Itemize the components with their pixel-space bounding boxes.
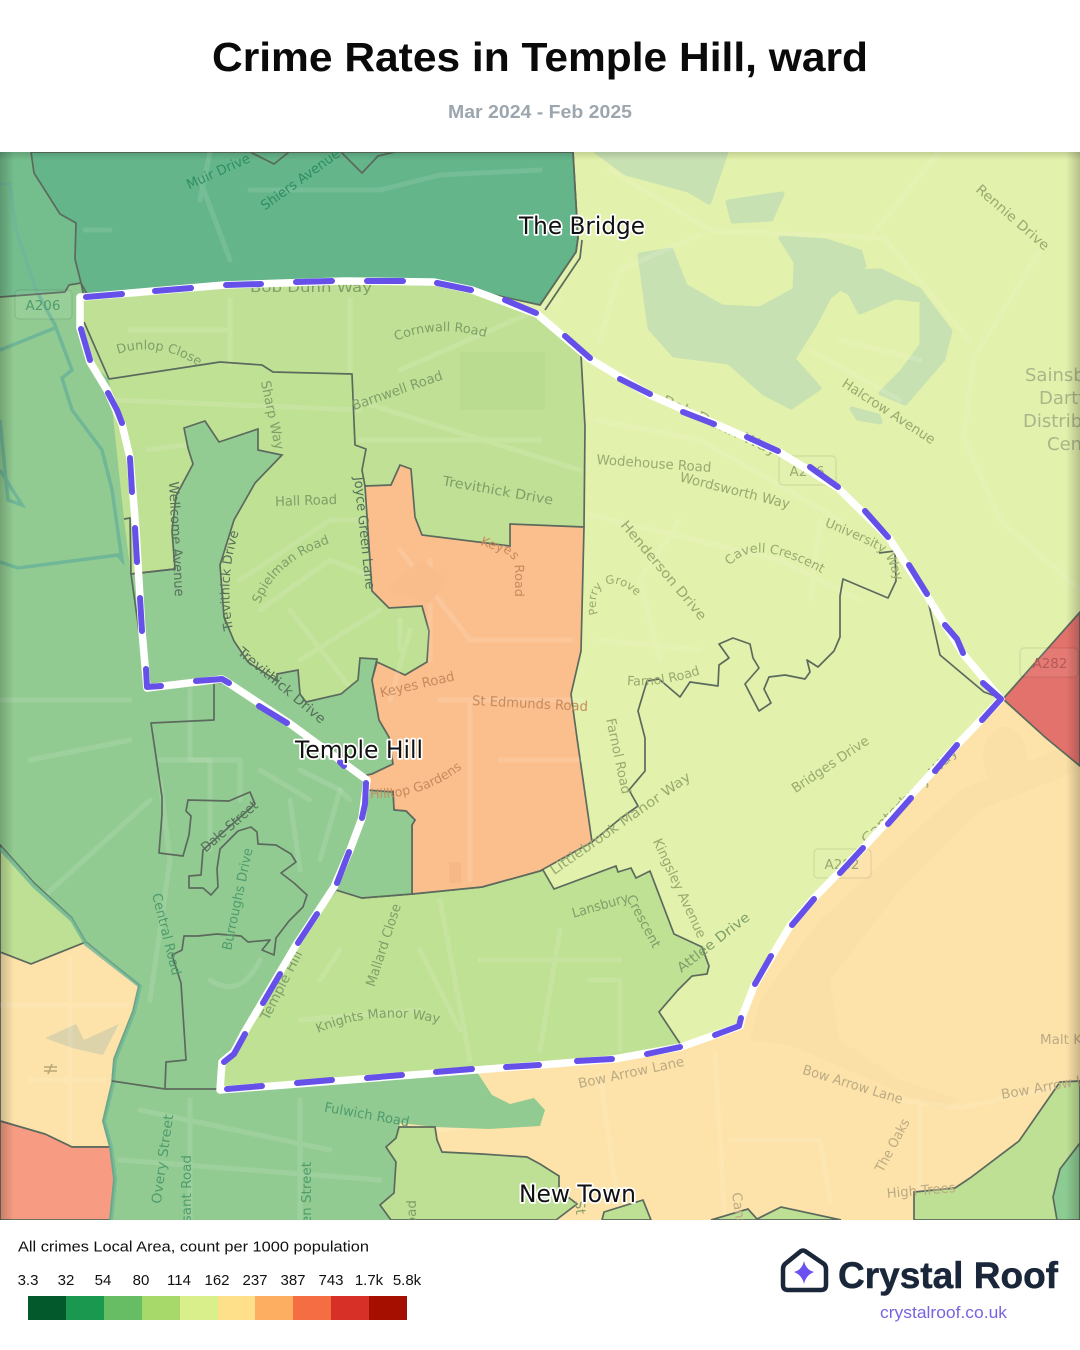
boundary: Central Road block bbox=[151, 680, 307, 1088]
label: The Oaks: The Oaks bbox=[872, 1116, 914, 1176]
legend bbox=[18, 1238, 422, 1320]
label: Central Road: Central Road bbox=[148, 892, 184, 977]
area: The Bridge, darker green bbox=[31, 152, 578, 305]
label: Hall Road: Hall Road bbox=[275, 492, 337, 510]
label: Henderson Drive: Henderson Drive bbox=[617, 518, 710, 624]
label: Fulwich Road: Fulwich Road bbox=[323, 1100, 411, 1130]
place: Temple Hill: Temple Hill bbox=[294, 736, 423, 764]
label: Rennie Drive: Rennie Drive bbox=[972, 182, 1052, 254]
legend values: 32 bbox=[58, 1272, 74, 1289]
boundary: ward west edge bbox=[84, 322, 109, 379]
area: west cream bbox=[0, 942, 139, 1147]
boundary: south road line bbox=[112, 1081, 220, 1089]
legend values: 162 bbox=[204, 1272, 230, 1289]
road plates bbox=[15, 290, 1078, 878]
legend values: 1.7k bbox=[355, 1272, 384, 1289]
area: south ward, Knights Manor light green bbox=[220, 866, 709, 1090]
label: University Way: University Way bbox=[826, 518, 902, 579]
boundary: north-east of The Bridge bbox=[540, 152, 582, 310]
area: far south-east mid green bbox=[1053, 1143, 1080, 1220]
legend values: 743 bbox=[318, 1272, 344, 1289]
place labels bbox=[294, 212, 645, 1208]
place: The Bridge: The Bridge bbox=[518, 212, 645, 240]
label: St Edmunds Road: St Edmunds Road bbox=[472, 693, 588, 715]
area: south-west salmon bbox=[0, 1121, 114, 1220]
label: Farnol Road east: Farnol Road bbox=[628, 665, 700, 686]
legend values bbox=[18, 1272, 422, 1289]
darker park block bbox=[460, 352, 545, 410]
plate: A282 south: A282 bbox=[824, 857, 860, 873]
road network west bbox=[0, 152, 540, 1000]
label: street stub: St bbox=[571, 1200, 588, 1215]
ward outline: purple dashes bbox=[81, 281, 1001, 1089]
orange road tints bbox=[390, 550, 580, 880]
icon: house with star bbox=[783, 1250, 826, 1290]
label: Crescent: Crescent bbox=[622, 892, 664, 951]
label: Trevithick Drive north: Trevithick Drive bbox=[440, 473, 554, 509]
label: Kingsley Avenue: Kingsley Avenue bbox=[649, 836, 709, 941]
area: south-west light green triangle bbox=[0, 845, 86, 964]
area: orange high-crime core bbox=[365, 465, 592, 894]
darker motorway areas on cream bbox=[750, 727, 1080, 1110]
boundary: winding east line bbox=[592, 551, 896, 842]
label: Trevithick Drive crescent: Trevithick Drive bbox=[220, 531, 238, 632]
legend values: 5.8k bbox=[393, 1272, 422, 1289]
label: Lansbury: Lansbury bbox=[570, 890, 630, 922]
label: Keyes Road north: Keyes Road bbox=[481, 536, 524, 596]
label: Knights Manor Way: Knights Manor Way bbox=[316, 1008, 440, 1032]
logo wordmark: Crystal Roof bbox=[838, 1255, 1059, 1296]
label: Trevithick Drive lower: Trevithick Drive bbox=[233, 644, 329, 727]
label: Sainsbury's Dartford Distribution Centre bbox=[1023, 365, 1080, 455]
label: Wellcome Avenue: Wellcome Avenue bbox=[165, 481, 187, 597]
subtitle: date range: Mar 2024 - Feb 2025 bbox=[448, 102, 632, 122]
ward interior: lower light green segment bbox=[109, 362, 440, 720]
mid-green lower road tints bbox=[120, 760, 380, 1220]
label: Bow Arrow Lane east: Bow Arrow Lane bbox=[801, 1062, 905, 1108]
railway station glyph bbox=[44, 1064, 57, 1074]
label: Bob Dunn Way north: Bob Dunn Way bbox=[250, 280, 372, 296]
boundary: top notches bbox=[250, 152, 395, 173]
logo: Crystal Roof bbox=[783, 1250, 1059, 1322]
area: south-east cream bbox=[390, 699, 1080, 1220]
label: Hilltop Gardens: Hilltop Gardens bbox=[371, 763, 461, 798]
label: Burroughs Drive: Burroughs Drive bbox=[219, 847, 257, 952]
label: Halcrow Avenue: Halcrow Avenue bbox=[839, 376, 938, 448]
legend values: 114 bbox=[167, 1272, 191, 1289]
label: Cavell Crescent: Cavell Crescent bbox=[726, 542, 825, 573]
ward outline: white bbox=[80, 281, 1001, 1090]
label: Dunlop Close: Dunlop Close bbox=[116, 340, 201, 366]
ward boundary bbox=[80, 281, 1001, 1090]
label: Barnwell Road: Barnwell Road bbox=[350, 368, 445, 414]
label: Bob Dunn Way east: Bob Dunn Way bbox=[660, 392, 780, 460]
plate: A282 south bbox=[814, 849, 871, 878]
legend colour scale bbox=[28, 1296, 407, 1320]
area: mid green, west of ward bbox=[0, 152, 400, 1220]
label: Littlebrook Manor Way: Littlebrook Manor Way bbox=[547, 769, 694, 879]
area: Fulwich Road tongue, mid green bbox=[380, 1072, 545, 1220]
legend values: 387 bbox=[280, 1272, 306, 1289]
label: Cornwall Road: Cornwall Road bbox=[394, 322, 487, 340]
north-east road network bbox=[590, 150, 1080, 660]
legend and branding footer bbox=[18, 1238, 1059, 1322]
small patches on orange bbox=[449, 862, 461, 883]
label: Overy Street: Overy Street bbox=[149, 1113, 177, 1205]
road labels under the ward line bbox=[250, 280, 961, 1024]
map base: low-crime yellow-green area bbox=[0, 152, 1080, 1220]
label: Canterbury Way: Canterbury Way bbox=[858, 744, 961, 847]
place: New Town: New Town bbox=[519, 1180, 636, 1208]
label: Spielman Road: Spielman Road bbox=[252, 534, 328, 603]
boundary: east edge by Rob Dunn Way bbox=[927, 596, 1003, 699]
legend values: 54 bbox=[95, 1272, 111, 1289]
label: Dale Street: Dale Street bbox=[198, 798, 261, 856]
road labels bbox=[116, 152, 1080, 1272]
title: Crime Rates in Temple Hill, ward bbox=[212, 34, 868, 80]
plate: A206 west bbox=[15, 290, 72, 319]
map edge shading bbox=[0, 152, 1080, 1220]
legend values: 3.3 bbox=[18, 1272, 38, 1289]
area: north-west green corner bbox=[0, 152, 81, 297]
label: Attlee Drive: Attlee Drive bbox=[674, 909, 753, 976]
label: Bridges Drive: Bridges Drive bbox=[789, 733, 872, 797]
boundary: west notch bbox=[124, 518, 175, 574]
label: Temple Hill road: Temple Hill bbox=[257, 948, 306, 1024]
plate: A206 east: A206 bbox=[789, 464, 825, 480]
boundary: A206 corner bbox=[0, 283, 88, 297]
label: High Trees: High Trees bbox=[886, 1180, 956, 1202]
boundary: ward north divider bbox=[109, 362, 366, 486]
label: Perry Grove: Perry Grove bbox=[588, 575, 640, 615]
label: Keyes Road lower: Keyes Road bbox=[378, 669, 456, 701]
area: east high-crime red bbox=[1003, 612, 1080, 766]
plate: A282 north bbox=[1020, 648, 1078, 677]
area: south light green pieces bbox=[602, 1081, 1080, 1220]
area: strip south of Temple Hill, mid green bbox=[336, 790, 415, 898]
grey patch near the station bbox=[45, 1024, 119, 1055]
legend values: 80 bbox=[133, 1272, 149, 1289]
label: Sharp Way: Sharp Way bbox=[257, 379, 287, 451]
boundary: east ward interior bbox=[581, 355, 585, 527]
plate: A282 north: A282 bbox=[1032, 656, 1068, 672]
canal edge bbox=[0, 848, 140, 1220]
header: title and date range bbox=[212, 34, 868, 122]
plate: A206 west: A206 bbox=[25, 298, 61, 314]
lakes in the north-east bbox=[597, 152, 950, 422]
area: south light green bbox=[380, 1127, 577, 1220]
boundary lines bbox=[0, 152, 1003, 1089]
map panel bbox=[0, 152, 1080, 1220]
label: Mallard Close: Mallard Close bbox=[363, 902, 405, 989]
label: Joyce Green Lane: Joyce Green Lane bbox=[350, 475, 378, 590]
plate: A206 east bbox=[779, 456, 836, 485]
label: Wodehouse Road: Wodehouse Road bbox=[596, 452, 712, 476]
label: Farnol Road south: Farnol Road bbox=[602, 717, 634, 796]
area: Trevithick crescent and Temple Hill, mid green bbox=[131, 421, 393, 778]
website link: crystalroof.co.uk bbox=[880, 1304, 1008, 1322]
legend values: 237 bbox=[242, 1272, 268, 1289]
north ward road network bbox=[115, 300, 580, 700]
canals in the west bbox=[0, 184, 122, 568]
legend title: All crimes Local Area, count per 1000 population bbox=[18, 1238, 369, 1256]
label: Bow Arrow Lane west: Bow Arrow Lane bbox=[577, 1054, 686, 1092]
ward interior: north light green bbox=[80, 281, 585, 800]
label: Wordsworth Way: Wordsworth Way bbox=[678, 470, 792, 512]
